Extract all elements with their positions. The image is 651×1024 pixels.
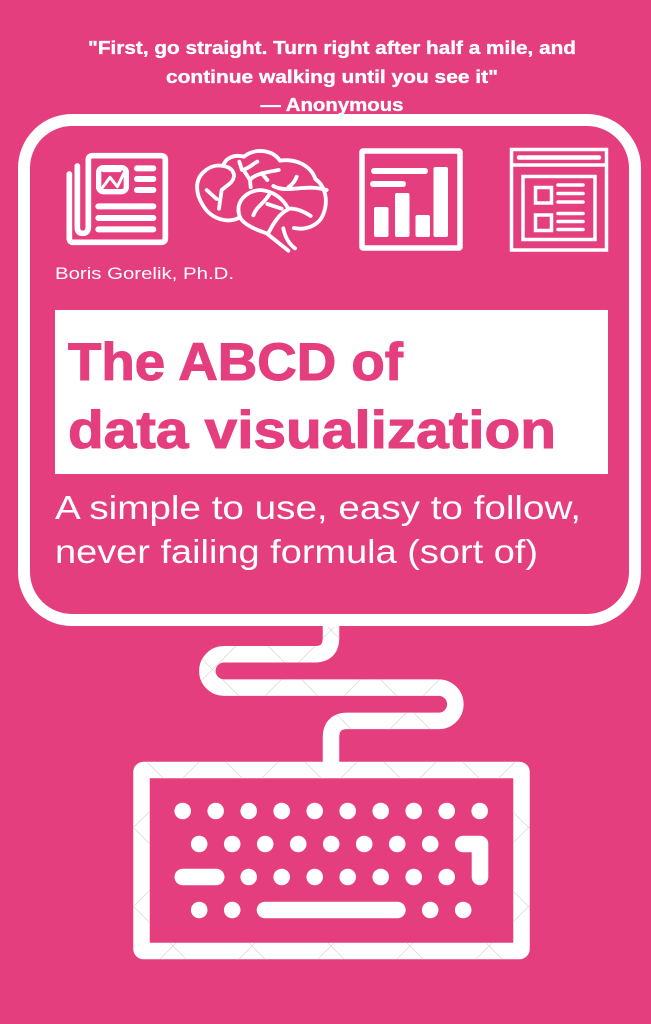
icon: newspaper [69, 156, 165, 242]
quote: "First, go straight. Turn right after half a mile, and [88, 38, 576, 58]
quote: continue walking until you see it" [166, 67, 498, 87]
enter key [463, 844, 480, 877]
monitor frame [24, 120, 635, 620]
author: Boris Gorelik, Ph.D. [55, 264, 234, 283]
quote [88, 38, 576, 115]
subtitle: never failing formula (sort of) [55, 533, 538, 570]
keyboard body [142, 770, 522, 951]
icon: bar chart [362, 151, 460, 248]
keys [174, 803, 488, 918]
title block: data visualization [68, 401, 556, 460]
title block [55, 310, 608, 474]
icon: brain [197, 151, 327, 251]
icon: web page layout [511, 150, 607, 250]
quote: — Anonymous [260, 95, 404, 115]
keyboard [142, 770, 522, 951]
subtitle: A simple to use, easy to follow, [55, 489, 581, 526]
cable [207, 624, 455, 764]
title block: The ABCD of [68, 333, 403, 392]
subtitle [55, 489, 581, 570]
